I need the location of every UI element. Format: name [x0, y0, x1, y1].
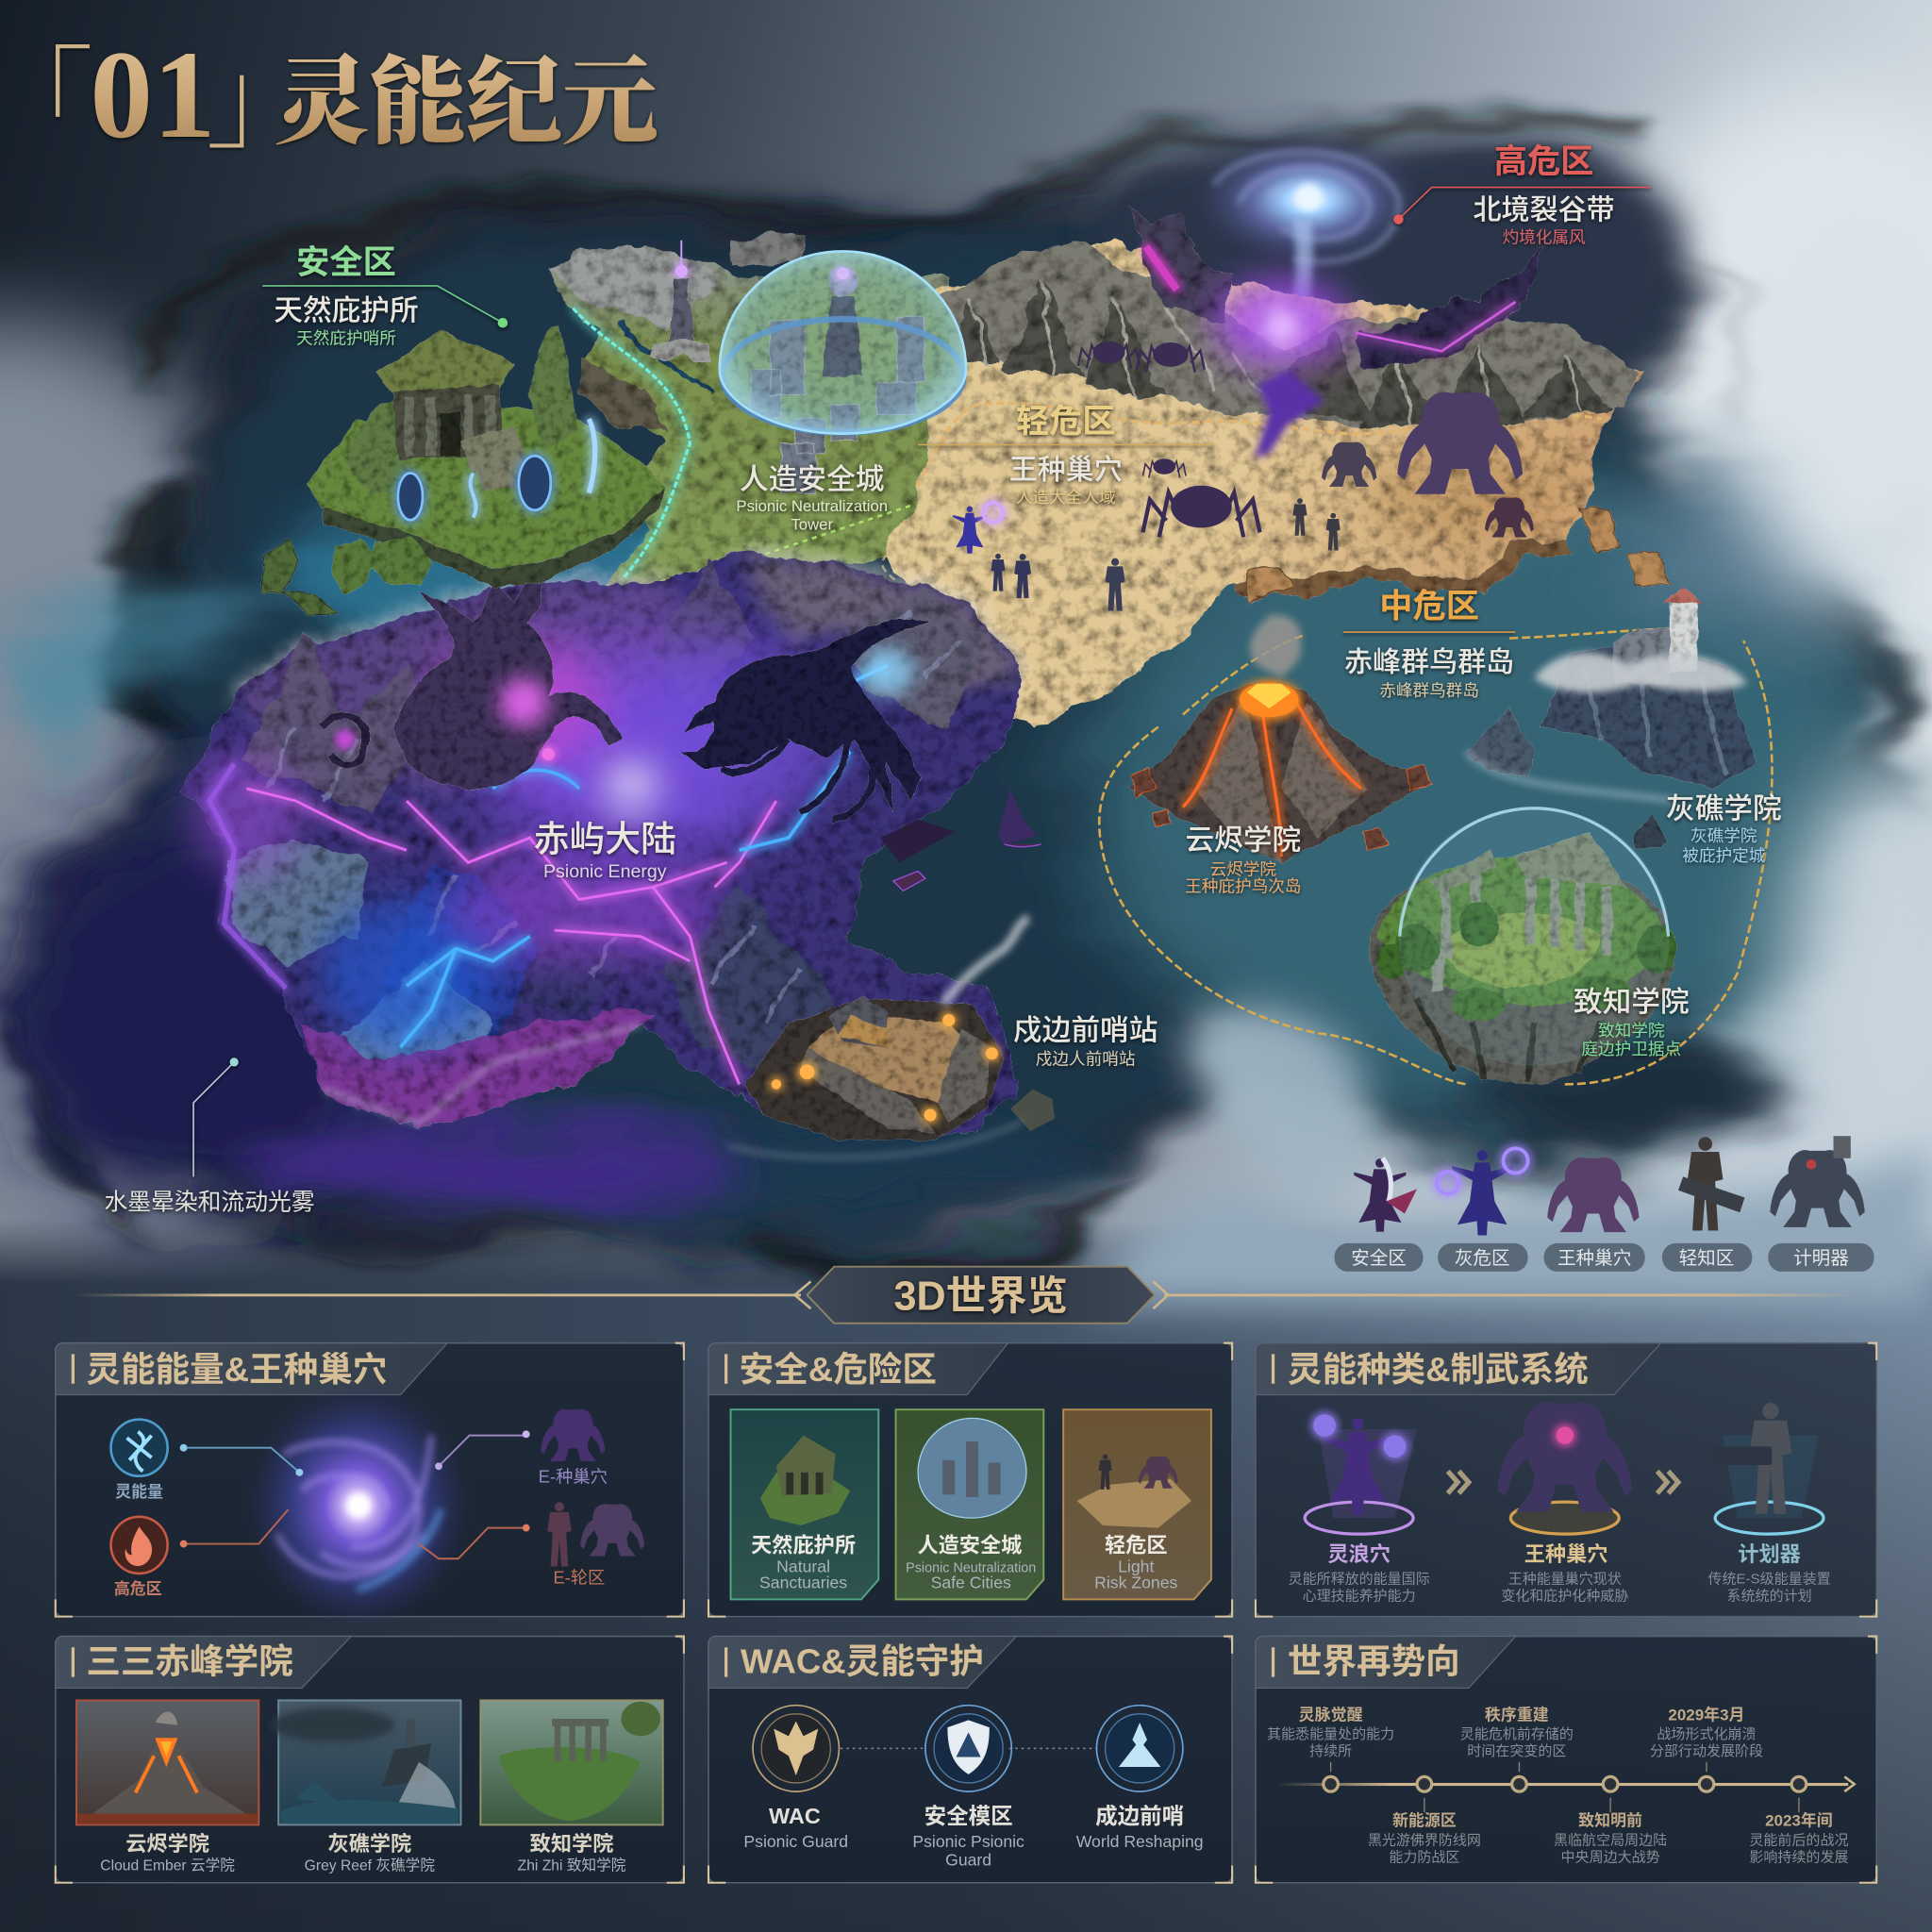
card: natural sanctuaries: Natural — [776, 1557, 830, 1576]
arrow — [1448, 1472, 1469, 1493]
title: 01 — [90, 25, 216, 164]
milestone 4: 中央周边大战势 — [1561, 1850, 1660, 1866]
callout: ink wash note — [104, 1058, 315, 1216]
safe-zone glowing borders — [573, 308, 912, 591]
purple continent — [185, 555, 1041, 1134]
panel: world reshaping timeline: 世界再势向 — [1288, 1642, 1460, 1681]
milestone 1: 持续所 — [1309, 1743, 1352, 1759]
callout: ink wash note: 水墨晕染和流动光雾 — [104, 1190, 315, 1216]
milestone 1: 其能悉能量处的能力 — [1267, 1726, 1394, 1742]
card: natural sanctuaries: 天然庇护所 — [751, 1533, 856, 1557]
panel: psionic types and weapon system — [1256, 1343, 1876, 1617]
card: light risk zones: 轻危区 — [1105, 1534, 1168, 1557]
panel: safe and danger zones: 安全&危险区 — [740, 1350, 937, 1389]
callout: light risk zone: 王种巢穴 — [1009, 455, 1123, 486]
icon: frontier sentinel: World Reshaping — [1076, 1832, 1204, 1851]
panel: psionic types and weapon system: 灵能种类&制武系统 — [1288, 1350, 1589, 1389]
figure: king hive beast on gold ring: 变化和庇护化种威胁 — [1501, 1589, 1628, 1605]
legend pills: 计明器 — [1793, 1248, 1849, 1269]
card: light risk zones: Risk Zones — [1094, 1574, 1178, 1592]
picture: Grey Reef: 灰礁学院 — [327, 1831, 411, 1856]
panel: WAC and psionic guard: WAC&灵能守护 — [741, 1642, 984, 1681]
panel: psionic energy and king hive: 灵能能量&王种巢穴 — [86, 1350, 387, 1389]
callout: mid risk zone: 赤峰群鸟群岛 — [1344, 647, 1514, 678]
figure: psion on purple ring — [1289, 1414, 1430, 1605]
timeline axis — [1276, 1762, 1855, 1812]
rift glow — [1146, 246, 1516, 458]
figure: psion on purple ring: 灵能所释放的能量国际 — [1289, 1571, 1430, 1587]
milestone 2: 新能源区 — [1392, 1811, 1457, 1830]
title: 灵能纪元 — [274, 26, 658, 164]
panel: safe and danger zones — [708, 1343, 1232, 1617]
label: Zhi Zhi academy: 庭边护卫据点 — [1581, 1040, 1681, 1058]
milestone 4 — [1554, 1812, 1667, 1866]
storm sky and vortex — [1084, 132, 1686, 382]
picture: Zhi Zhi: Zhi Zhi 致知学院 — [518, 1857, 626, 1874]
panel: Chifeng academies: 三三赤峰学院 — [86, 1642, 293, 1681]
label: Grey Reef academy: 被庇护定城 — [1682, 846, 1766, 865]
label: Cloud Ember academy: 王种庇护鸟次岛 — [1185, 877, 1302, 896]
label: Chiyu continent: Psionic Energy — [543, 861, 667, 882]
tentacle beast — [680, 619, 930, 820]
callout: safe zone: 天然庇护所 — [274, 294, 419, 327]
picture: Cloud Ember — [76, 1700, 258, 1874]
label: Grey Reef academy — [1666, 791, 1782, 865]
figure: psion on purple ring: 灵浪穴 — [1327, 1541, 1391, 1566]
picture: Zhi Zhi: 致知学院 — [530, 1831, 613, 1856]
figure: soldier on cyan ring — [1708, 1403, 1831, 1605]
icon: WAC emblem: Psionic Guard — [743, 1832, 848, 1851]
section banner: 3D世界览 — [893, 1274, 1068, 1319]
desert risk boundary — [882, 403, 1602, 702]
label: frontier outpost: 戍边人前哨站 — [1036, 1049, 1136, 1068]
land: desert — [887, 241, 1668, 729]
callout: mid risk zone: 赤峰群鸟群岛 — [1379, 681, 1479, 700]
icon: frontier sentinel: 成边前哨 — [1095, 1804, 1184, 1828]
Grey Reef lighthouse island — [1466, 587, 1756, 848]
callout: safe zone: 安全区 — [296, 244, 396, 281]
icon: safe guard shield: 安全模区 — [924, 1804, 1013, 1828]
milestone 6: 灵能前后的战况 — [1749, 1832, 1848, 1848]
Natural sanctuary temple island — [262, 326, 665, 616]
legend pills: 王种巢穴 — [1557, 1248, 1631, 1269]
label: Zhi Zhi academy: 致知学院 — [1598, 1021, 1665, 1040]
small beasts — [881, 820, 955, 862]
callout: safe zone — [262, 244, 508, 347]
icon: WAC emblem: WAC — [769, 1804, 821, 1828]
picture: Grey Reef — [271, 1700, 460, 1874]
icon: hive creature — [539, 1409, 608, 1486]
continent rock — [185, 555, 1025, 1134]
label: frontier outpost: 戍边前哨站 — [1013, 1013, 1158, 1046]
callout: mid risk zone: 中危区 — [1379, 588, 1479, 625]
panel: Chifeng academies — [56, 1637, 684, 1883]
card: safe cities: Safe Cities — [931, 1574, 1011, 1592]
figure: safe-zone psion — [1354, 1158, 1417, 1232]
Zhi Zhi dome island — [1368, 808, 1677, 1084]
icon: hive creature: E-种巢穴 — [539, 1466, 608, 1486]
figure: mech — [1770, 1136, 1865, 1227]
icon: high risk flame — [111, 1517, 168, 1598]
callout: light risk zone: 轻危区 — [1016, 403, 1116, 440]
panel: world reshaping timeline — [1256, 1637, 1876, 1883]
picture: Grey Reef: Grey Reef 灰礁学院 — [305, 1857, 435, 1874]
Mid-risk dashed boundary — [1099, 628, 1772, 1084]
legend pills — [1335, 1243, 1874, 1272]
milestone 6 — [1749, 1811, 1848, 1866]
milestone 2: 能力防战区 — [1389, 1850, 1459, 1866]
lightning — [246, 789, 776, 1084]
section banner — [74, 1267, 1860, 1324]
card: natural sanctuaries: Sanctuaries — [759, 1574, 847, 1592]
icon: safe guard shield — [912, 1706, 1024, 1869]
card: safe cities: Psionic Neutralization — [906, 1561, 1036, 1576]
milestone 1 — [1267, 1706, 1394, 1759]
label: artificial safe city: Psionic Neutralization — [736, 497, 888, 515]
label: Zhi Zhi academy — [1574, 985, 1690, 1058]
land: green plains and grey coast — [542, 232, 949, 616]
milestone 2: 黑光游佛界防线网 — [1368, 1832, 1481, 1848]
panel: psionic energy and king hive — [56, 1343, 684, 1629]
milestone 5: 分部行动发展阶段 — [1650, 1743, 1763, 1759]
milestone 5 — [1650, 1705, 1763, 1759]
picture: Cloud Ember: Cloud Ember 云学院 — [100, 1857, 235, 1874]
callout: high risk zone: 北境裂谷带 — [1473, 194, 1615, 225]
figure: king hive beast on gold ring — [1498, 1403, 1632, 1605]
northern mountains and rift — [930, 204, 1639, 425]
label: frontier outpost — [1013, 1013, 1158, 1068]
legend pills: 轻知区 — [1679, 1248, 1734, 1269]
callout: high risk zone — [1393, 143, 1651, 246]
label: Grey Reef academy: 灰礁学院 — [1666, 791, 1782, 824]
figure: grey-zone mage — [1437, 1148, 1528, 1235]
figure: gunner — [1678, 1137, 1744, 1231]
milestone 2 — [1368, 1811, 1481, 1866]
figure: soldier on cyan ring: 传统E-S级能量装置 — [1708, 1571, 1831, 1587]
character row — [1354, 1136, 1865, 1235]
milestone 4: 致知明前 — [1578, 1812, 1642, 1830]
milestone 6: 影响持续的发展 — [1749, 1850, 1848, 1866]
callout: high risk zone: 高危区 — [1494, 143, 1593, 180]
icon: WAC emblem — [743, 1706, 848, 1851]
card: natural sanctuaries — [731, 1409, 878, 1599]
milestone 3: 时间在突变的区 — [1467, 1743, 1566, 1759]
milestone 4: 黑临航空局周边陆 — [1554, 1832, 1667, 1848]
milestone 3: 灵能危机前存储的 — [1460, 1726, 1574, 1742]
label: Cloud Ember academy: 云烬学院 — [1210, 859, 1276, 878]
picture: Zhi Zhi — [480, 1700, 663, 1874]
icon: safe guard shield: Psionic Psionic — [912, 1832, 1024, 1851]
picture: Cloud Ember: 云烬学院 — [125, 1831, 209, 1856]
label: Cloud Ember academy: 云烬学院 — [1185, 824, 1301, 857]
milestone 3 — [1460, 1705, 1574, 1759]
label: Zhi Zhi academy: 致知学院 — [1574, 985, 1690, 1018]
label: artificial safe city: Tower — [791, 516, 833, 534]
horned demon — [321, 569, 623, 789]
label: artificial safe city — [736, 463, 888, 534]
card: safe cities — [896, 1409, 1043, 1599]
figure: king hive beast — [1547, 1158, 1639, 1232]
label: artificial safe city: 人造安全城 — [740, 463, 884, 496]
icon: psionic energy: 灵能量 — [115, 1483, 163, 1501]
milestone 5: 2029年3月 — [1668, 1705, 1745, 1724]
milestone 6: 2023年间 — [1765, 1811, 1833, 1830]
figure: soldier on cyan ring: 计划器 — [1738, 1542, 1801, 1566]
label: Grey Reef academy: 灰礁学院 — [1690, 826, 1757, 845]
label: Chiyu continent — [534, 821, 676, 882]
desert creatures — [953, 341, 1534, 610]
callout: high risk zone: 灼境化属风 — [1503, 227, 1586, 246]
callout: light risk zone: 人造大全人域 — [1016, 488, 1116, 507]
card: light risk zones — [1063, 1409, 1211, 1599]
icon: zone creatures — [547, 1502, 644, 1587]
callout: light risk zone — [918, 403, 1214, 507]
Neutralization tower and dome city — [651, 241, 966, 492]
figure: soldier on cyan ring: 系统统的计划 — [1727, 1589, 1812, 1605]
pale mist over ink — [1084, 185, 1932, 1306]
icon: frontier sentinel — [1076, 1706, 1204, 1851]
title: 」 — [206, 10, 317, 170]
legend pills: 安全区 — [1351, 1248, 1407, 1269]
panel: WAC and psionic guard — [708, 1637, 1232, 1883]
label: Chiyu continent: 赤屿大陆 — [534, 821, 676, 860]
label: Cloud Ember academy — [1185, 824, 1302, 896]
legend pills: 灰危区 — [1455, 1248, 1510, 1269]
card: light risk zones: Light — [1118, 1557, 1154, 1576]
icon: zone creatures: E-轮区 — [553, 1567, 605, 1587]
arrow — [1657, 1472, 1678, 1493]
milestone 5: 战场形式化崩溃 — [1657, 1726, 1757, 1742]
card: safe cities: 人造安全城 — [917, 1533, 1022, 1557]
icon: psionic energy — [111, 1420, 168, 1501]
figure: king hive beast on gold ring: 王种能量巢穴现状 — [1508, 1571, 1622, 1587]
callout: safe zone: 天然庇护哨所 — [296, 328, 396, 347]
icon: high risk flame: 高危区 — [114, 1579, 162, 1598]
galaxy — [245, 1382, 472, 1629]
title — [0, 10, 658, 170]
callout: mid risk zone — [1343, 588, 1516, 700]
figure: psion on purple ring: 心理技能养护能力 — [1303, 1589, 1416, 1605]
milestone 3: 秩序重建 — [1485, 1705, 1549, 1724]
Cloud Ember volcano — [1127, 614, 1432, 862]
icon: safe guard shield: Guard — [945, 1850, 991, 1869]
Frontier outpost fort — [727, 918, 1055, 1158]
figure: king hive beast on gold ring: 王种巢穴 — [1524, 1542, 1607, 1566]
milestone 1: 灵脉觉醒 — [1299, 1706, 1363, 1724]
ink wash and sea — [0, 121, 1923, 1283]
